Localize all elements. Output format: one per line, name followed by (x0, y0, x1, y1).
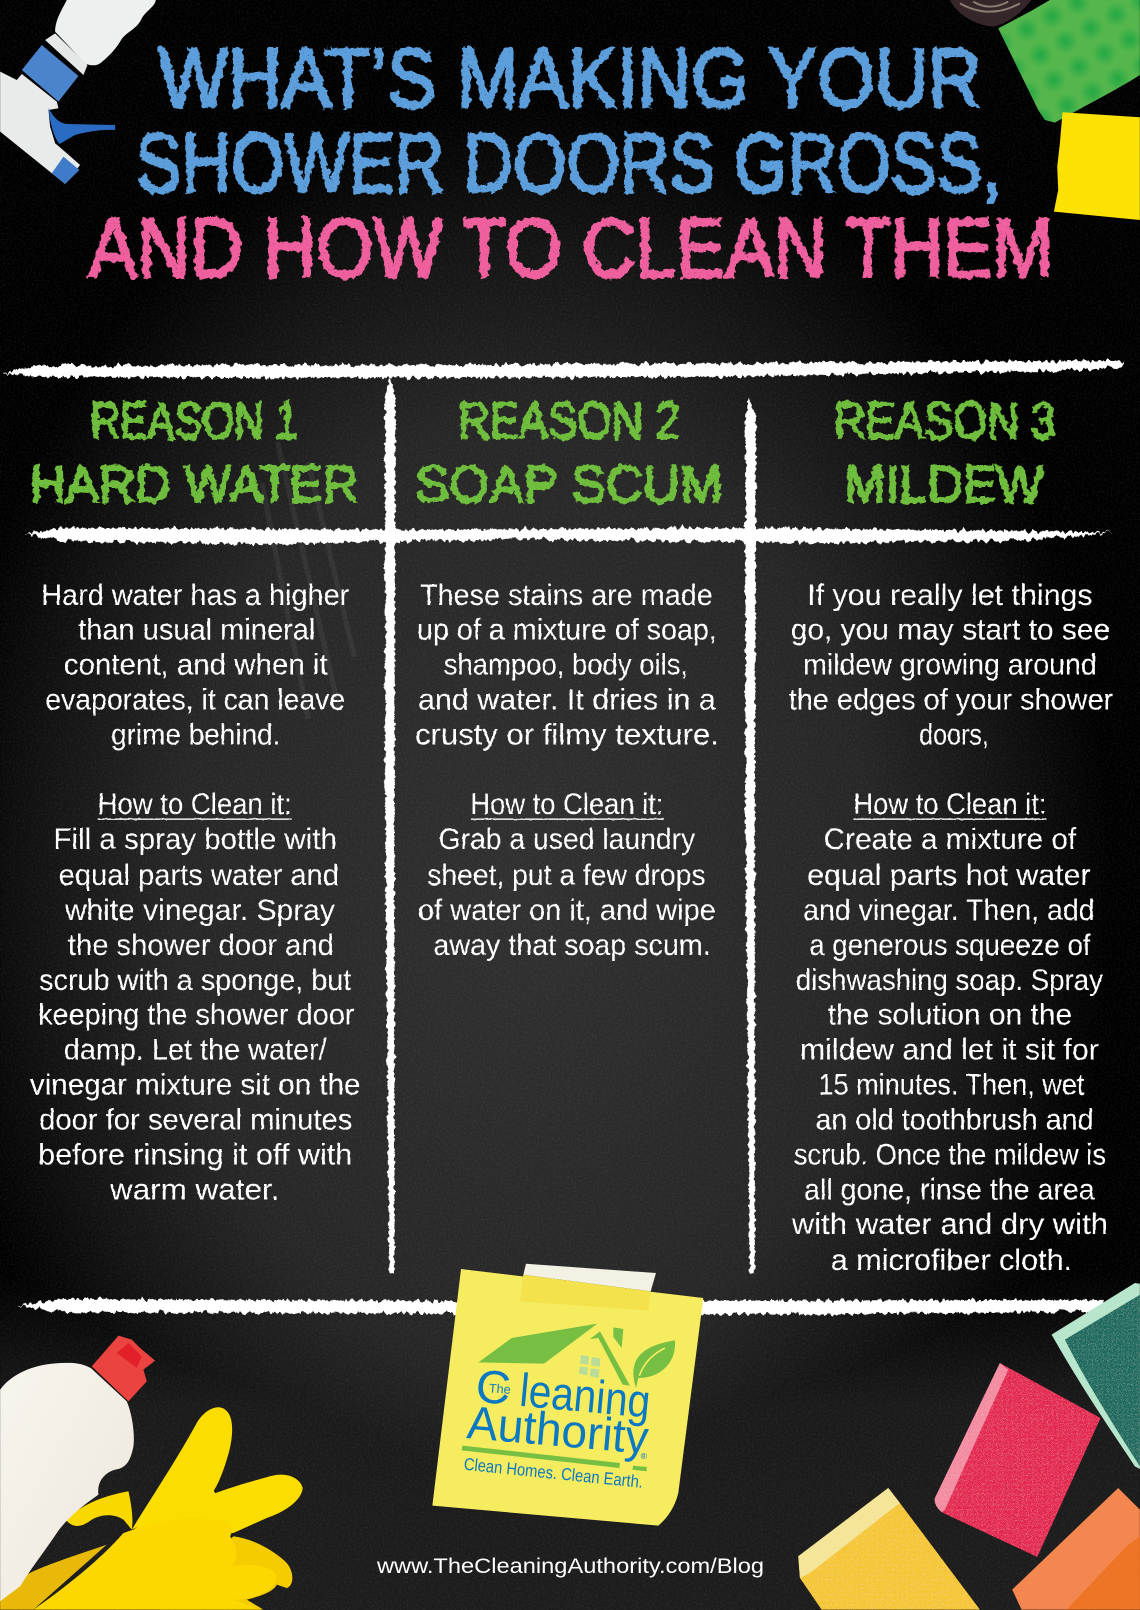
icon: orange sponge (1012, 1488, 1140, 1610)
text block: soap scum: These stains are made (420, 579, 713, 612)
text block: mildew: scrub. Once the mildew is (794, 1138, 1106, 1171)
icon: teal sponge (1052, 1283, 1140, 1469)
tape (520, 1264, 656, 1311)
text block: mildew: a generous squeeze of (809, 929, 1091, 962)
logo wordmark: C (474, 1360, 513, 1415)
chalk rule: under headings (26, 528, 1113, 544)
panel: reason 1 heading (30, 392, 358, 514)
text block: mildew: dishwashing soap. Spray (796, 964, 1103, 997)
text block: hard water: Hard water has a higher (41, 579, 349, 612)
panel: reason 2 heading: REASON 2 (458, 392, 680, 450)
text block: mildew: and vinegar. Then, add (803, 894, 1095, 927)
text block: soap scum: up of a mixture of soap, (417, 614, 717, 647)
icon: steel wool (950, 0, 1032, 27)
text block: soap scum: of water on it, and wipe (418, 894, 716, 927)
icon: pink sponge (935, 1363, 1101, 1557)
text block: hard water: door for several minutes (39, 1103, 352, 1136)
panel: reason 1 heading: REASON 1 (90, 392, 298, 450)
text block: hard water: damp. Let the water/ (64, 1034, 327, 1067)
text block: mildew: mildew growing around (803, 649, 1097, 682)
text block: mildew: go, you may start to see (791, 614, 1110, 647)
text block: hard water: scrub with a sponge, but (39, 964, 352, 997)
text block: hard water: How to Clean it: (98, 788, 292, 821)
text block: mildew: the solution on the (828, 999, 1072, 1032)
text block: mildew: How to Clean it: (853, 788, 1046, 821)
panel: reason 2 heading (415, 392, 723, 514)
text block: mildew: doors, (919, 718, 989, 751)
text block: hard water: Fill a spray bottle with (54, 823, 337, 856)
chalk rule: top (3, 360, 1124, 378)
panel: reason 3 heading: MILDEW (844, 456, 1044, 514)
text block: mildew: 15 minutes. Then, wet (818, 1069, 1085, 1102)
logo house (478, 1324, 675, 1388)
logo wordmark: Authority (465, 1396, 651, 1464)
panel: reason 1 heading: HARD WATER (30, 456, 358, 514)
text block: mildew: an old toothbrush and (815, 1103, 1094, 1136)
text block: mildew: a microfiber cloth. (831, 1244, 1072, 1277)
text block: hard water: equal parts water and (59, 859, 339, 892)
text block: mildew: all gone, rinse the area (804, 1173, 1095, 1206)
panel: reason 3 heading (834, 392, 1056, 514)
text block: mildew: mildew and let it sit for (800, 1034, 1099, 1067)
text block: hard water (30, 579, 361, 1206)
icon: bleach bottle cap (92, 1336, 155, 1401)
text block: soap scum: away that soap scum. (433, 929, 711, 962)
note paper (432, 1269, 703, 1526)
icon: yellow-orange sponge (798, 1488, 980, 1610)
text block: mildew: If you really let things (807, 579, 1093, 612)
text block: hard water: before rinsing it off with (38, 1138, 352, 1171)
icon: yellow sponge (1054, 112, 1140, 220)
text block: hard water: vinegar mixture sit on the (30, 1069, 361, 1102)
text block: mildew: Create a mixture of (824, 823, 1077, 856)
text block: hard water: warm water. (109, 1173, 279, 1206)
icon: green sponge (998, 0, 1140, 123)
text block: soap scum: sheet, put a few drops (427, 859, 706, 892)
text block: mildew: with water and dry with (791, 1208, 1108, 1241)
text block: hard water: keeping the shower door (38, 999, 354, 1032)
website url: www.TheCleaningAuthority.com/Blog (376, 1553, 764, 1578)
logo wordmark: Clean Homes. Clean Earth. (463, 1454, 644, 1492)
title line 1: WHAT’S MAKING YOUR (158, 31, 982, 125)
sticky note with logo (432, 1264, 703, 1526)
logo wordmark: leaning (518, 1364, 653, 1428)
text block: hard water: than usual mineral (78, 614, 315, 647)
text block: hard water: white vinegar. Spray (64, 894, 335, 927)
chalk rule: bottom (19, 1299, 1104, 1314)
chalk divider: left (385, 377, 395, 1273)
logo bar (462, 1446, 647, 1471)
text block: hard water: grime behind. (111, 718, 280, 751)
text block: soap scum: shampoo, body oils, (444, 649, 688, 682)
logo wordmark: The (488, 1381, 511, 1397)
logo wordmark: ® (641, 1451, 648, 1461)
text block: soap scum: crusty or filmy texture. (415, 718, 719, 751)
text block: soap scum: How to Clean it: (470, 788, 663, 821)
text block: hard water: content, and when it (64, 649, 328, 682)
icon: spray bottle (0, 0, 156, 184)
text block: mildew (789, 579, 1113, 1277)
text block: mildew: the edges of your shower (789, 684, 1113, 717)
icon: yellow glove (0, 1407, 303, 1610)
text block: hard water: evaporates, it can leave (45, 684, 345, 717)
text block: mildew: equal parts hot water (807, 859, 1091, 892)
logo wordmark (463, 1360, 653, 1492)
panel: reason 3 heading: REASON 3 (834, 392, 1056, 450)
chalk divider: right (746, 397, 756, 1273)
panel: reason 2 heading: SOAP SCUM (415, 456, 723, 514)
text block: soap scum: Grab a used laundry (439, 823, 695, 856)
title (88, 31, 1054, 295)
icon: bleach bottle body (0, 1363, 134, 1601)
text block: soap scum: and water. It dries in a (418, 684, 716, 717)
text block: hard water: the shower door and (68, 929, 334, 962)
text block: soap scum (415, 579, 719, 962)
